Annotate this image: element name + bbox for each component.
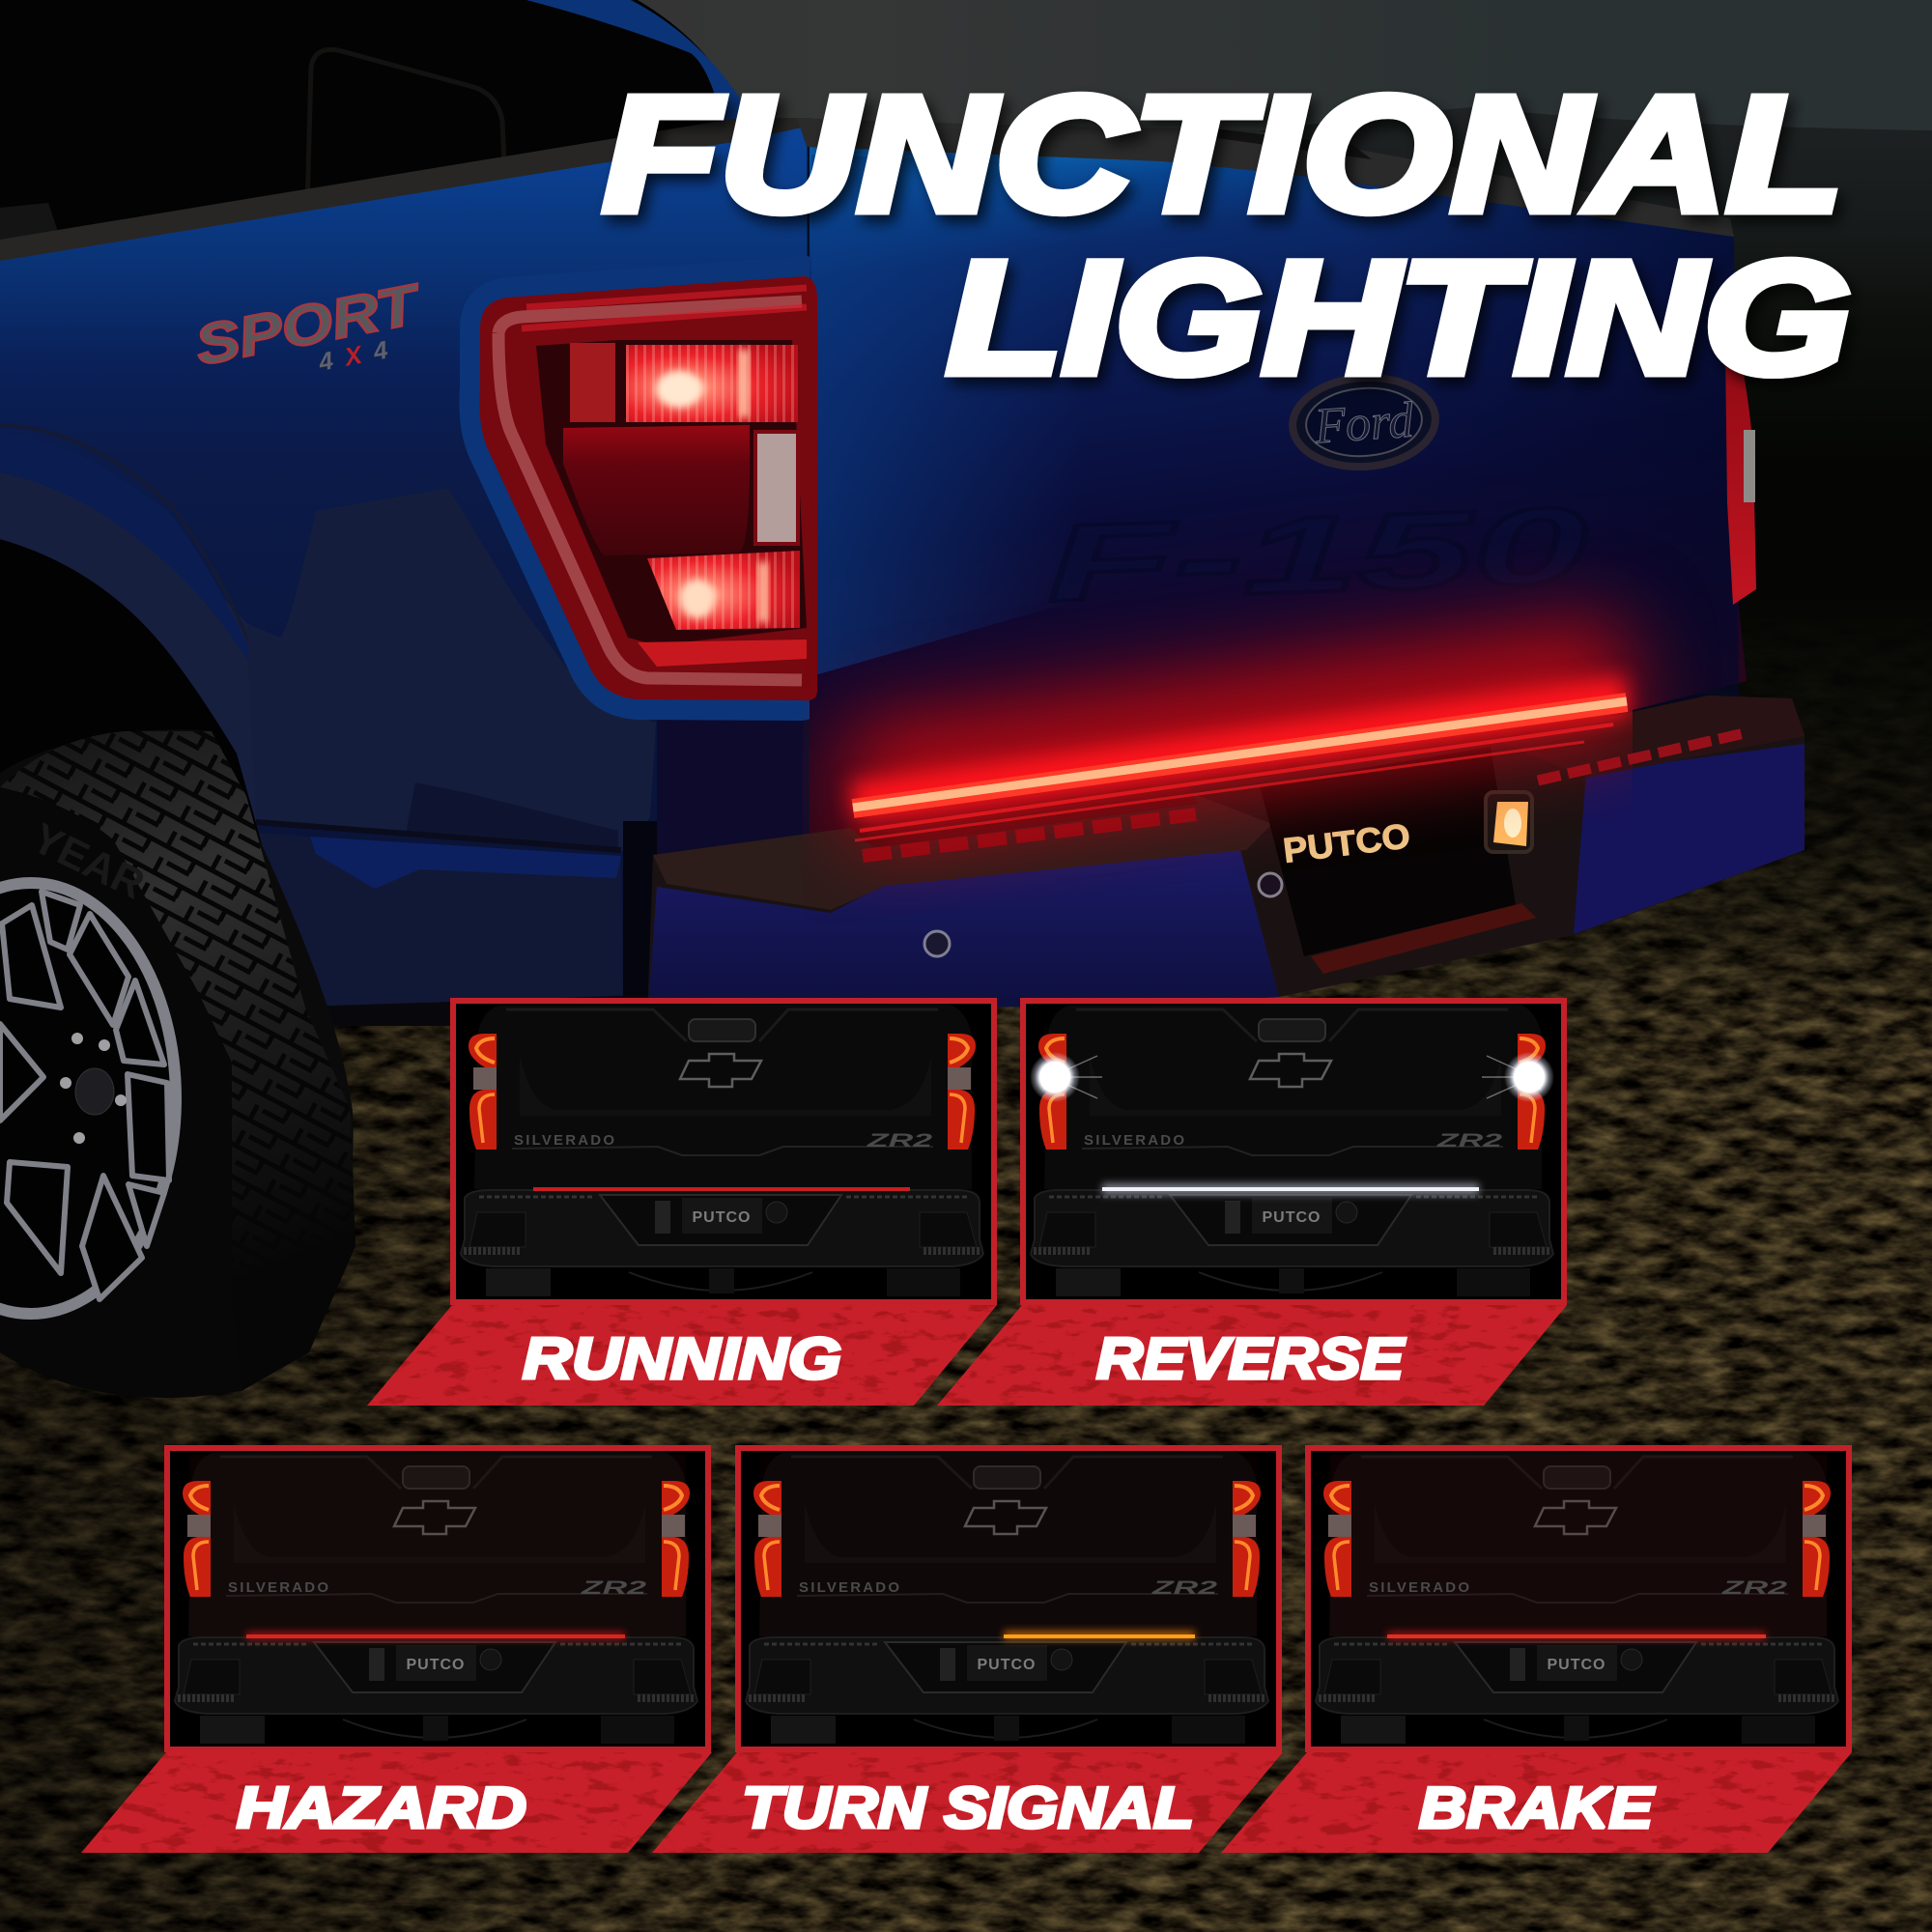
embossed F-150 tailgate lettering: F-150 [1044,485,1589,624]
panel: brake [1308,1448,1849,1749]
panel: running: PUTCO [692,1209,752,1226]
SPORT 4x4 badge: SPORT [190,272,427,378]
panel: brake: SILVERADO [1369,1579,1470,1596]
panel: reverse: SILVERADO [1084,1132,1185,1149]
label banner: turn signal [652,1752,1283,1853]
truck: bed rail [0,118,811,263]
truck: cab window and roof [0,0,749,288]
LED light strip on tailgate [853,676,1627,840]
panel: running: ZR2 [866,1131,933,1151]
panel: turn signal [738,1448,1279,1749]
panel: brake: ZR2 [1720,1578,1788,1599]
Ford oval badge: Ford [1312,392,1416,455]
front tire: YEAR [25,814,152,909]
front tire [0,729,355,1398]
panel: reverse: PUTCO [1262,1209,1321,1226]
PUTCO plate lettering: PUTCO [1281,815,1412,870]
panel: running [453,1001,994,1302]
label banner: hazard [81,1752,712,1853]
title: FUNCTIONAL LIGHTING: FUNCTIONAL [603,63,1843,246]
front wheel rim [0,883,176,1314]
rear bumper [647,696,1804,1020]
panel: reverse: ZR2 [1435,1131,1503,1151]
panel: turn signal: SILVERADO [799,1579,900,1596]
panel: turn signal: ZR2 [1151,1578,1218,1599]
right tail light [1725,348,1756,605]
panel: hazard: SILVERADO [228,1579,329,1596]
truck: tailgate panel [797,118,1747,850]
label banner: running [367,1305,997,1406]
truck: wheel well [0,522,328,1034]
background: sky and hills [0,0,1932,734]
panel: hazard: PUTCO [406,1657,466,1673]
panel: running: SILVERADO [514,1132,615,1149]
panel: turn signal: PUTCO [978,1657,1036,1673]
license lamp [1486,792,1532,852]
panel: brake: PUTCO [1548,1657,1605,1673]
panel: reverse [1023,1001,1564,1302]
label banner: turn signal: TURN SIGNAL [742,1776,1194,1840]
label banner: hazard: HAZARD [237,1776,526,1840]
label banner: reverse: REVERSE [1096,1326,1406,1391]
label banner: reverse [937,1305,1567,1406]
truck: side body panel [0,126,811,1026]
panel: hazard [167,1448,708,1749]
label banner: running: RUNNING [523,1326,841,1391]
Ford oval badge [1290,373,1438,471]
taillight surround blue band [479,276,817,700]
background: dirt ground [0,599,1932,1932]
panel: hazard: ZR2 [580,1578,647,1599]
title: FUNCTIONAL LIGHTING: LIGHTING [947,229,1851,408]
main tail light [479,276,817,700]
label banner: brake: BRAKE [1419,1776,1655,1840]
SPORT 4x4 badge: 4 X 4 [315,335,390,377]
label banner: brake [1221,1752,1852,1853]
title: FUNCTIONAL LIGHTING [603,63,1851,408]
